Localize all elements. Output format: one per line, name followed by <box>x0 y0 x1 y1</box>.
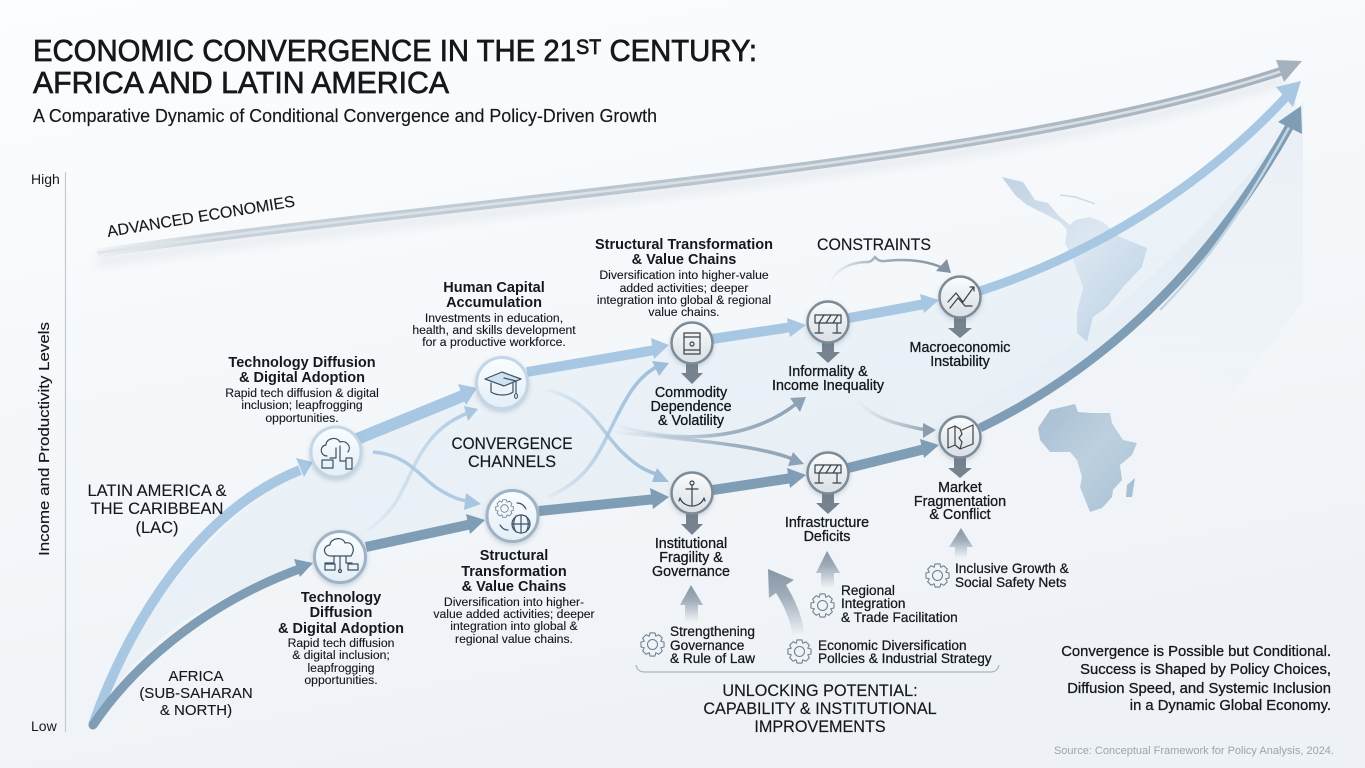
improvement: governance: & Rule of Law <box>670 651 755 666</box>
text: technology diffusion (LAC): Technology Diffusion <box>228 355 376 371</box>
constraint: informality and inequality <box>772 302 885 394</box>
heading: convergence channels: CONVERGENCE <box>452 435 573 453</box>
title: CENTURY: <box>601 33 757 68</box>
conclusion callout <box>1061 644 1331 714</box>
conclusion callout: Convergence is Possible but Conditional. <box>1061 644 1331 660</box>
constraint: macroeconomic instability: Macroeconomic <box>910 340 1010 356</box>
text: human capital: for a productive workforce. <box>422 335 566 349</box>
cross links between channels <box>367 257 951 530</box>
text: structural transformation (LAC): integration into global & regional <box>597 293 771 307</box>
text: structural transformation (LAC): Diversification into higher-value <box>599 268 769 282</box>
constraint: infrastructure deficits: Infrastructure <box>785 515 869 531</box>
region label: Latin America and the Caribbean <box>87 482 227 537</box>
constraint: commodity dependence: & Volatility <box>658 413 725 429</box>
arrow: diversification up <box>768 569 804 636</box>
constraint: institutional fragility: Institutional <box>655 536 727 552</box>
arrow: inclusion up <box>949 528 973 558</box>
map: Africa <box>1038 404 1137 512</box>
constraint: market fragmentation: & Conflict <box>929 507 991 523</box>
heading: unlocking potential: UNLOCKING POTENTIAL: <box>722 682 918 700</box>
text: technology diffusion (Africa): & Digital Adoption <box>278 621 404 637</box>
conclusion callout: Diffusion Speed, and Systemic Inclusion <box>1067 681 1331 697</box>
shaded area under curves <box>92 88 1303 725</box>
region label: Africa: (SUB-SAHARAN <box>139 685 253 702</box>
node: technology diffusion (LAC) <box>311 427 361 477</box>
constraint: informality and inequality: Income Inequality <box>772 378 885 394</box>
improvement: diversification: Economic Diversification <box>818 638 967 653</box>
heading: unlocking potential: CAPABILITY & INSTITUTIONAL <box>703 700 937 718</box>
region label: Latin America and the Caribbean: THE CARIBBEAN <box>91 500 223 518</box>
curve: advanced economies <box>97 60 1302 262</box>
improvement: diversification: Pollcies & Industrial Strategy <box>818 651 992 666</box>
improvement: inclusive growth: Social Safety Nets <box>955 575 1067 590</box>
text: structural transformation (Africa): Diversification into higher- <box>444 595 584 609</box>
text: structural transformation (Africa): Transformation <box>461 564 567 580</box>
constraint: market fragmentation: Market <box>938 480 982 496</box>
region label: Africa: & NORTH) <box>160 702 232 719</box>
text: structural transformation (Africa): regional value chains. <box>455 632 573 646</box>
curve: advanced economies: ADVANCED ECONOMIES <box>106 193 296 241</box>
link: structural to commodity <box>547 361 669 497</box>
title <box>33 33 757 100</box>
text: structural transformation (LAC): added activities; deeper <box>620 281 748 295</box>
text: structural transformation (LAC) <box>595 237 773 319</box>
arrow: governance up <box>680 585 703 622</box>
title: ST <box>576 36 601 59</box>
constraint: institutional fragility <box>652 472 730 580</box>
heading: convergence channels: CHANNELS <box>468 453 556 471</box>
arrow: trade up <box>816 551 840 588</box>
constraint: macroeconomic instability <box>910 276 1010 370</box>
text: structural transformation (LAC): value chains. <box>648 305 720 319</box>
text: structural transformation (Africa): value added activities; deeper <box>433 607 595 621</box>
text: structural transformation (LAC): & Value Chains <box>632 252 736 268</box>
text: technology diffusion (Africa): Diffusion <box>310 605 372 621</box>
source: Source: Conceptual Framework for Policy Analysis, 2024. <box>1054 745 1334 757</box>
improvement: governance: Strengthening <box>670 624 755 639</box>
constraint: market fragmentation: Fragmentation <box>914 494 1006 510</box>
constraint: market fragmentation <box>914 416 1006 523</box>
text: technology diffusion (LAC): Rapid tech diffusion & digital <box>225 386 379 400</box>
constraint: macroeconomic instability: Instability <box>930 354 991 370</box>
y axis <box>31 171 66 734</box>
constraint: commodity dependence <box>650 322 732 429</box>
text: human capital: Human Capital <box>443 280 545 296</box>
link: informality to market fragmentation <box>857 400 936 438</box>
constraint: infrastructure deficits <box>785 452 869 545</box>
title: AFRICA AND LATIN AMERICA <box>33 65 449 100</box>
heading: unlocking potential: IMPROVEMENTS <box>754 718 886 736</box>
improvement: inclusive growth <box>926 561 1069 590</box>
text: human capital: Accumulation <box>446 295 542 311</box>
region label: Latin America and the Caribbean: (LAC) <box>135 519 179 537</box>
curve: Latin America and Caribbean <box>93 81 1301 725</box>
conclusion callout: Success is Shaped by Policy Choices, <box>1080 662 1331 678</box>
improvement: governance: Governance <box>670 638 744 653</box>
heading: constraints: CONSTRAINTS <box>817 236 931 254</box>
text: technology diffusion (Africa): & digital inclusion; <box>292 648 390 662</box>
node: human capital <box>476 358 528 408</box>
bracket <box>636 665 999 672</box>
improvement: governance <box>641 624 755 666</box>
improvement: diversification <box>788 638 992 666</box>
subtitle: A Comparative Dynamic of Conditional Convergence and Policy-Driven Growth <box>33 106 657 126</box>
improvement: inclusive growth: Inclusive Growth & <box>955 561 1069 576</box>
link: human capital to institutions <box>547 390 669 482</box>
improvement: regional integration: Integration <box>841 596 905 611</box>
constraint: informality and inequality: Informality & <box>788 364 868 380</box>
text: structural transformation (LAC): Structural Transformation <box>595 237 773 253</box>
link: technology to structural <box>373 452 481 510</box>
text: structural transformation (Africa): Structural <box>480 548 548 564</box>
region label: Africa: AFRICA <box>168 668 224 685</box>
constraint: institutional fragility: Fragility & <box>659 550 723 566</box>
text: technology diffusion (Africa) <box>278 590 404 687</box>
region label: Latin America and the Caribbean: LATIN AMERICA & <box>87 482 227 500</box>
y axis: High <box>31 171 60 187</box>
constraint: commodity dependence: Commodity <box>655 385 728 401</box>
text: technology diffusion (LAC) <box>225 355 379 425</box>
text: structural transformation (Africa): & Value Chains <box>462 579 566 595</box>
text: technology diffusion (LAC): opportunities. <box>265 411 339 425</box>
conclusion callout: in a Dynamic Global Economy. <box>1130 698 1331 714</box>
link: constraints bracket <box>828 257 951 293</box>
text: human capital: health, and skills development <box>412 323 576 337</box>
curve: Africa <box>93 106 1302 725</box>
node: structural transformation (Africa) <box>487 490 538 542</box>
improvement: regional integration: Regional <box>841 583 895 598</box>
y axis: Low <box>31 718 58 734</box>
heading: unlocking potential <box>703 682 937 736</box>
heading: convergence channels <box>452 435 573 471</box>
y axis: Income and Productivity Levels <box>37 322 53 556</box>
text: technology diffusion (Africa): opportunities. <box>304 673 378 687</box>
text: structural transformation (Africa): integration into global & <box>450 619 578 633</box>
text: technology diffusion (Africa): Rapid tech diffusion <box>288 636 394 650</box>
improvement: regional integration: & Trade Facilitation <box>841 610 958 625</box>
text: structural transformation (Africa) <box>433 548 595 646</box>
text: technology diffusion (LAC): & Digital Adoption <box>239 370 365 386</box>
constraint: commodity dependence: Dependence <box>650 399 732 415</box>
constraint: institutional fragility: Governance <box>652 564 730 580</box>
text: human capital: Investments in education, <box>425 311 563 325</box>
map: Latin America <box>1002 177 1147 342</box>
link: to informality <box>615 397 806 437</box>
text: technology diffusion (Africa): leapfrogging <box>307 661 375 675</box>
region label: Africa <box>139 668 253 719</box>
link: technology to human capital <box>367 406 478 530</box>
text: technology diffusion (Africa): Technology <box>301 590 381 606</box>
node: technology diffusion (Africa) <box>314 532 366 582</box>
link: to infrastructure <box>615 432 804 466</box>
text: human capital <box>412 280 576 349</box>
improvement: regional integration <box>811 583 958 625</box>
text: technology diffusion (LAC): inclusion; leapfrogging <box>241 398 363 412</box>
title: ECONOMIC CONVERGENCE IN THE 21 <box>33 33 608 68</box>
constraint: infrastructure deficits: Deficits <box>804 529 850 545</box>
